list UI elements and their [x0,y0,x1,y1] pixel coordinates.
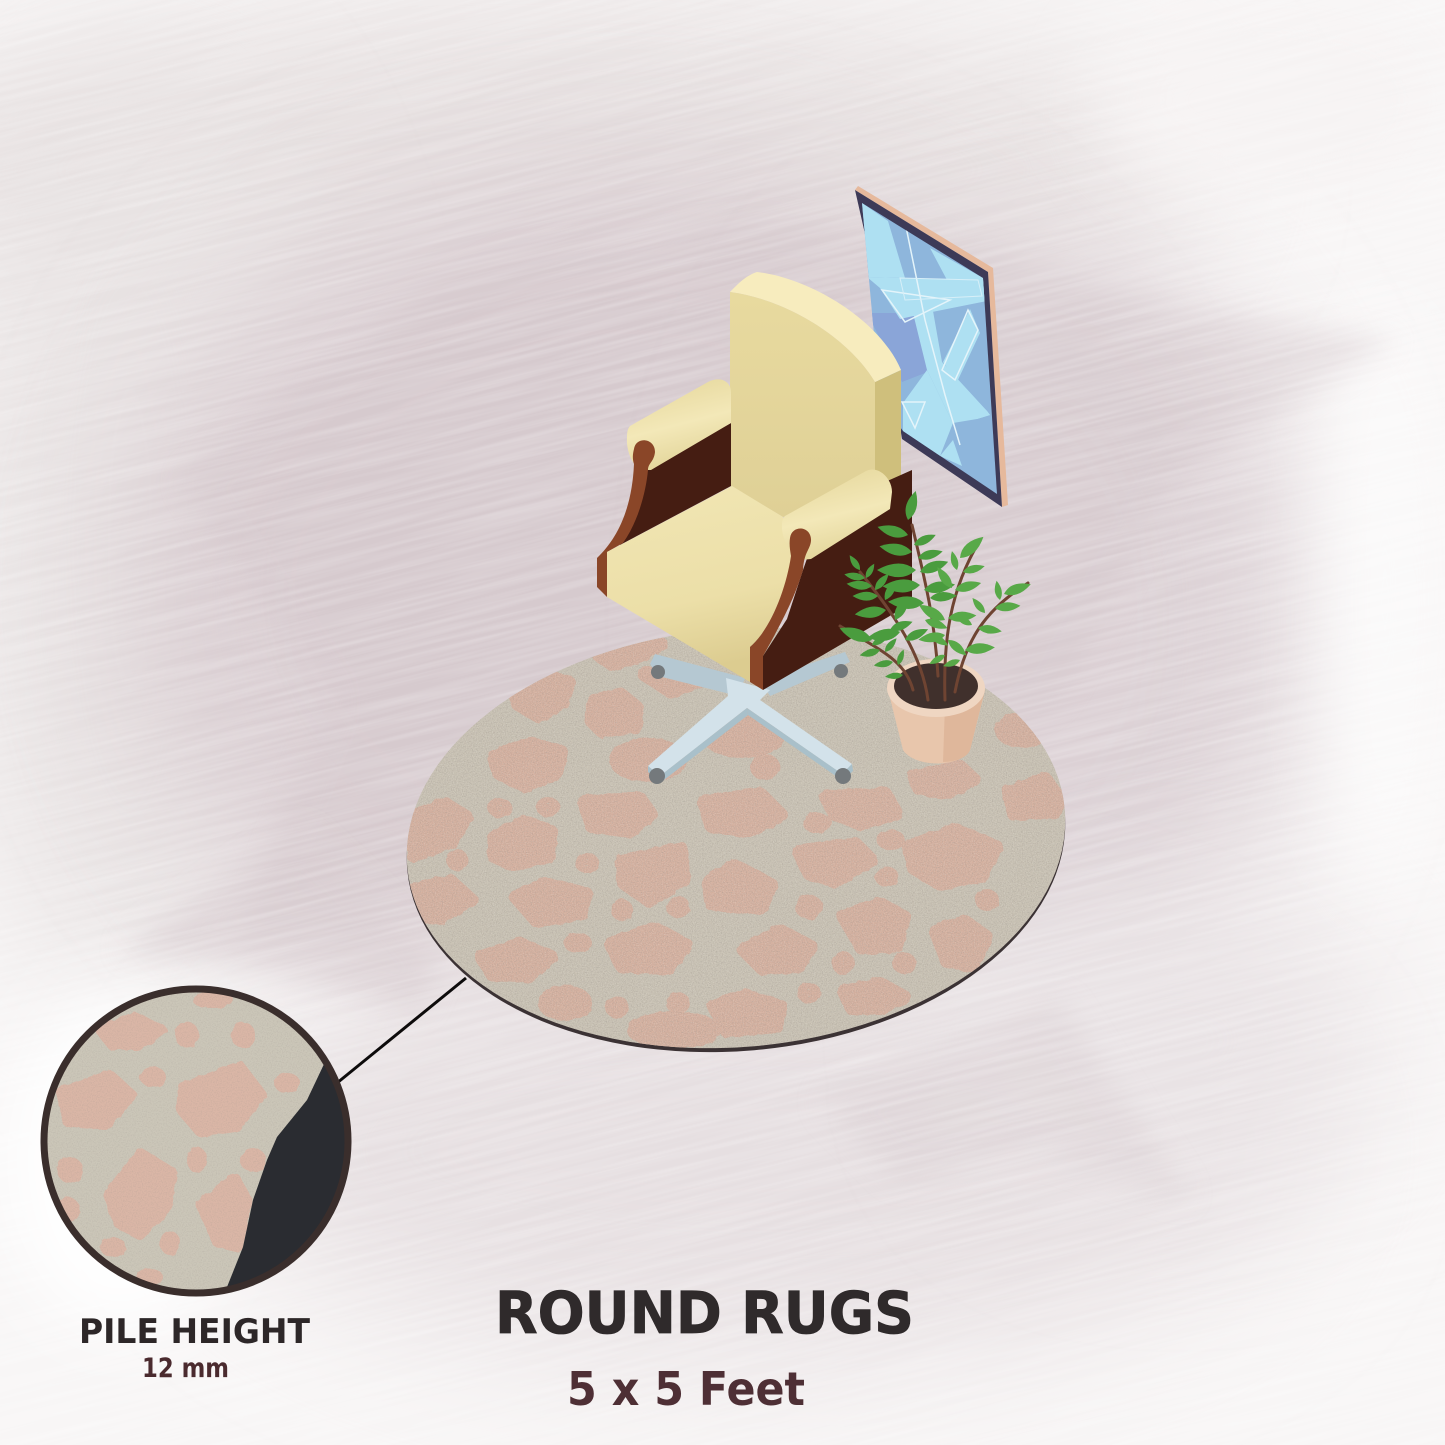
chair back side and top [875,370,901,480]
plant leaves [837,490,957,680]
picture frame edge [855,186,1008,507]
panel: office armchair [597,272,912,784]
right arm wood [750,529,811,690]
title: round rugs: ROUND RUGS [495,1279,914,1347]
black rug backing [227,1065,344,1286]
left armrest [627,379,731,470]
picture dark frame [855,190,1002,507]
plant pot [888,690,985,764]
label: pile height: PILE HEIGHT [79,1312,311,1352]
panel: round rug [406,628,1066,1052]
right armrest [782,469,892,560]
inset rug texture [48,992,344,1290]
chair wheels [649,664,851,784]
left arm wood [597,440,655,597]
chair base [648,652,853,784]
panel: framed wall picture [850,186,1010,510]
panel: potted plant [837,490,1032,764]
plant leaves right [916,533,1032,669]
rug backing edge [389,603,1083,1079]
panel: pile height inset [40,985,360,1300]
chair back front [730,292,875,517]
plant pot rim [887,659,985,717]
inset ring [44,989,348,1293]
rug pile surface with pattern [400,620,1080,1060]
label: 12 mm: 12 mm [142,1353,229,1384]
plant stems [840,525,1028,700]
subtitle: size: 5 x 5 Feet [567,1362,805,1416]
plant soil [894,663,978,709]
picture glass pattern [862,203,997,494]
chair seat [607,486,792,682]
leader line [337,978,466,1083]
right arm side panel [763,470,912,690]
left arm side panel [620,423,731,545]
